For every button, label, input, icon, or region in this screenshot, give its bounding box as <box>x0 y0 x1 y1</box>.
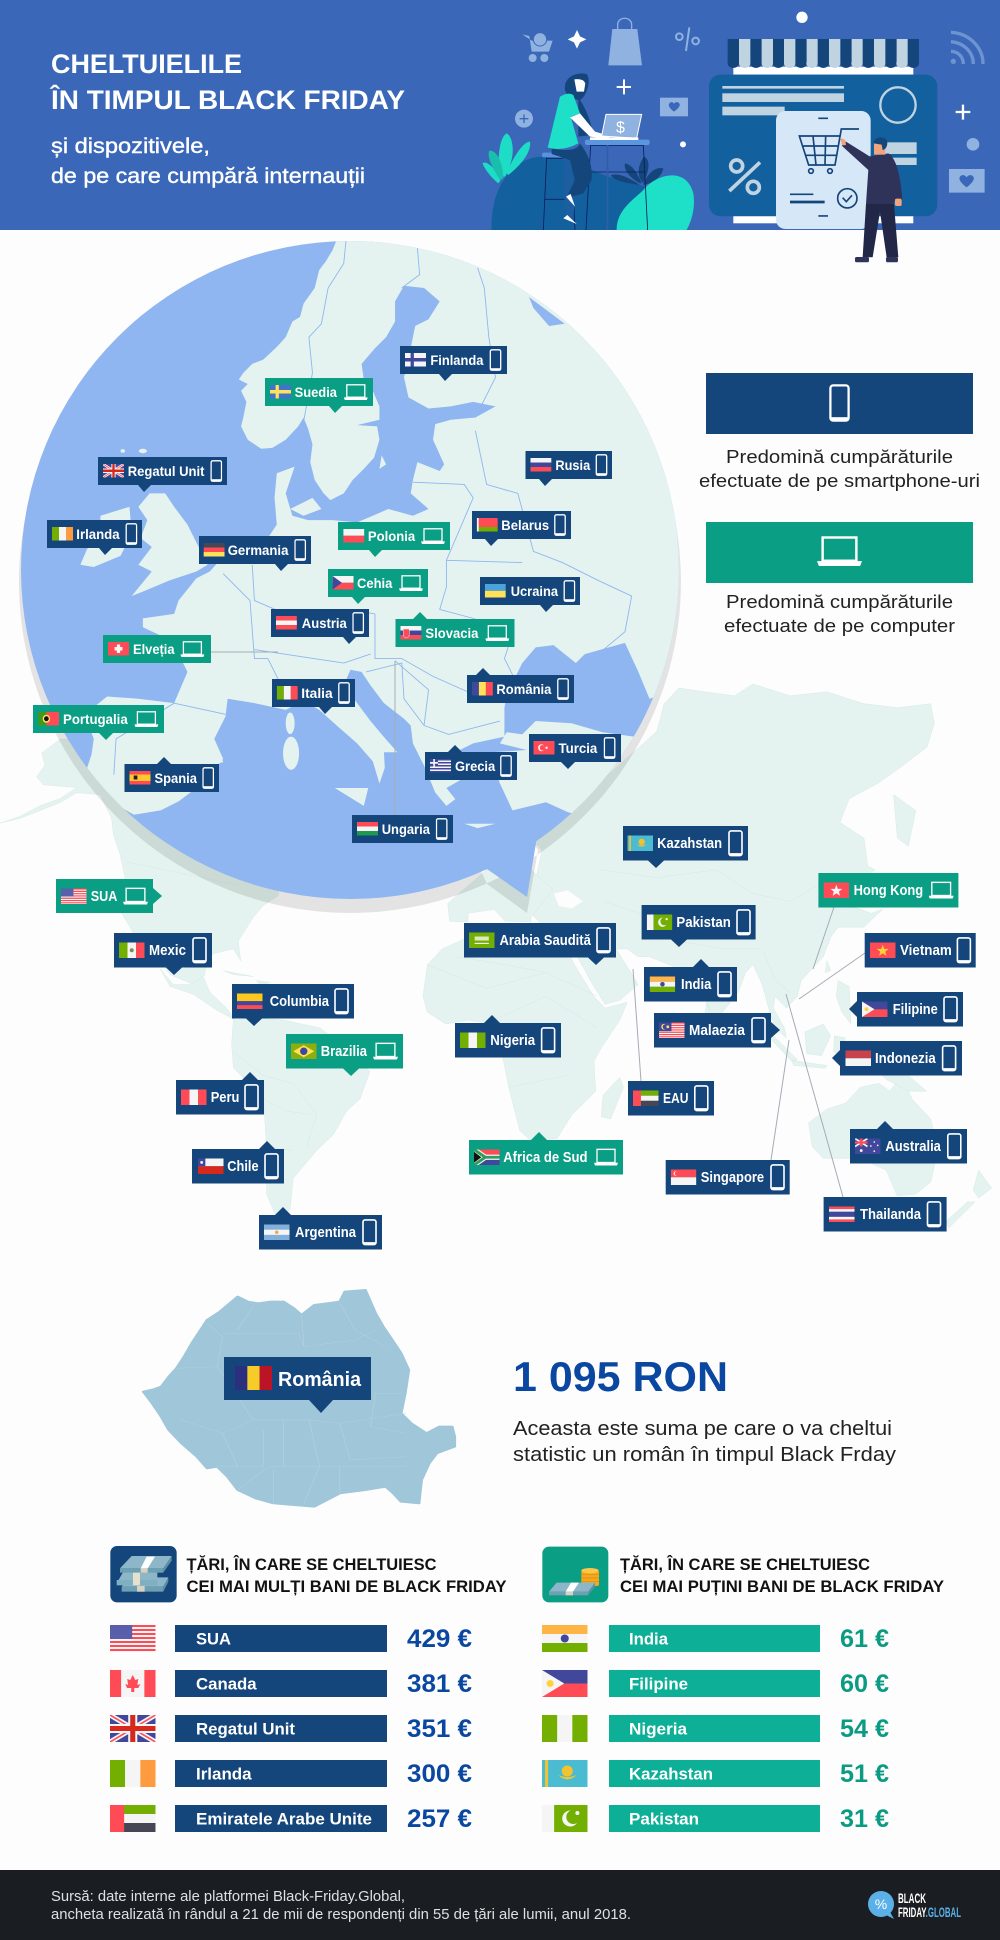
label: Columbia <box>232 984 354 1026</box>
row: Irlanda: 300 € <box>407 1760 472 1788</box>
label: Filipine <box>849 992 963 1026</box>
illustration: woman with laptop: $ <box>616 120 625 137</box>
row: Pakistan: Pakistan <box>629 1810 699 1828</box>
label: Finlanda <box>400 346 507 381</box>
label: Elveția <box>103 635 211 663</box>
heading: most money <box>186 1555 507 1596</box>
logo: BLACK <box>898 1890 926 1906</box>
row: SUA: 429 € <box>407 1625 472 1653</box>
row: Emiratele Arabe Unite: 257 € <box>407 1805 472 1833</box>
label: Ungaria <box>352 815 453 843</box>
label: Pakistan <box>642 905 756 947</box>
label: Vietnam <box>865 933 976 968</box>
label: Suedia <box>265 378 373 413</box>
subtitle <box>51 135 365 188</box>
text: amount description <box>513 1418 896 1466</box>
label: Slovacia <box>396 612 514 647</box>
row: Emiratele Arabe Unite: Emiratele Arabe Unite <box>196 1810 372 1828</box>
label: Kazahstan <box>623 826 748 868</box>
label: Finlanda: Finlanda <box>430 352 484 368</box>
figure: 1 095 RON: 1 095 RON <box>513 1353 728 1400</box>
label: Peru <box>176 1072 264 1114</box>
icon: stacks of banknotes <box>110 1546 177 1602</box>
subtitle: de pe care cumpără internauții <box>51 165 365 188</box>
heading: least money <box>620 1555 945 1596</box>
label: Argentina: Argentina <box>295 1224 357 1241</box>
world map background <box>0 684 992 1228</box>
row: Emiratele Arabe Unite <box>110 1805 472 1833</box>
row: Pakistan: 31 € <box>840 1805 889 1833</box>
label: România: România <box>496 681 552 697</box>
circle shadow <box>19 251 681 913</box>
label: Vietnam: Vietnam <box>900 942 952 959</box>
label: Italia <box>272 679 355 714</box>
footer source text: ancheta realizată în rândul a 21 de mii de respondenți din 55 de țări ale lumii, anul 2018. <box>51 1907 631 1923</box>
label: Chile: Chile <box>227 1158 259 1175</box>
label: Belarus: Belarus <box>501 517 549 533</box>
legend: computer text: efectuate de pe computer <box>724 615 955 636</box>
label: India <box>644 959 737 1002</box>
row: India: 61 € <box>840 1625 889 1653</box>
label: Malaezia: Malaezia <box>689 1022 746 1039</box>
heading: most money: ȚĂRI, ÎN CARE SE CHELTUIESC <box>186 1555 436 1574</box>
label: Chile <box>192 1141 284 1184</box>
label: SUA: SUA <box>91 888 118 905</box>
legend <box>699 373 980 636</box>
label: SUA <box>56 879 162 913</box>
label: India: India <box>681 976 712 993</box>
heading: most money: CEI MAI MULȚI BANI DE BLACK FRIDAY <box>186 1577 507 1596</box>
Romania map <box>143 1290 455 1507</box>
label: Regatul Unit: Regatul Unit <box>128 463 205 479</box>
row: Canada: 381 € <box>407 1670 472 1698</box>
row: Nigeria: 54 € <box>840 1715 889 1743</box>
label: Thailanda <box>824 1197 947 1232</box>
label: Africa de Sud: Africa de Sud <box>503 1149 588 1166</box>
label: Austria <box>271 609 369 644</box>
label: Portugalia: Portugalia <box>63 711 128 727</box>
label: Germania <box>199 536 311 571</box>
label: Thailanda: Thailanda <box>860 1206 922 1223</box>
footer source text: Sursă: date interne ale platformei Black-Friday.Global, <box>51 1889 405 1905</box>
text: amount description: Aceasta este suma pe care o va cheltui <box>513 1418 892 1440</box>
label: Polonia: Polonia <box>368 528 415 544</box>
row: Kazahstan <box>542 1760 889 1788</box>
row: Canada: Canada <box>196 1676 257 1694</box>
table: highest spending <box>110 1625 472 1833</box>
row: India: India <box>629 1630 669 1648</box>
label: Elveția: Elveția <box>133 641 175 657</box>
heading: least money: ȚĂRI, ÎN CARE SE CHELTUIESC <box>620 1555 870 1574</box>
legend: computer bar <box>706 522 973 583</box>
label: Brazilia: Brazilia <box>321 1043 368 1060</box>
label: România (Romania map) <box>224 1357 371 1413</box>
label: Africa de Sud <box>469 1132 623 1174</box>
label: Mexic: Mexic <box>149 942 186 959</box>
row: Nigeria <box>542 1715 889 1743</box>
footer band <box>0 1870 1000 1940</box>
label: Singapore <box>666 1160 790 1194</box>
label: Mexic <box>114 933 212 975</box>
label: EAU: EAU <box>663 1090 688 1107</box>
title: ÎN TIMPUL BLACK FRIDAY <box>49 84 405 115</box>
logo <box>868 1890 961 1920</box>
row: Filipine: Filipine <box>629 1676 688 1694</box>
label: Columbia: Columbia <box>270 993 330 1010</box>
label: Turcia: Turcia <box>558 740 597 756</box>
legend: smartphone text <box>699 446 980 491</box>
label: Peru: Peru <box>211 1089 239 1106</box>
row: Nigeria: Nigeria <box>629 1720 688 1738</box>
label: Cehia <box>328 569 428 604</box>
row: Regatul Unit: Regatul Unit <box>196 1720 296 1738</box>
label: Arabia Saudită: Arabia Saudită <box>500 932 591 949</box>
label: Suedia: Suedia <box>295 384 337 400</box>
label: Austria: Austria <box>302 615 347 631</box>
label: Australia <box>850 1121 967 1164</box>
row: India <box>542 1625 889 1653</box>
label: Portugalia <box>33 705 164 740</box>
label: Singapore: Singapore <box>701 1169 764 1186</box>
row: Filipine <box>542 1670 889 1698</box>
label: Ungaria: Ungaria <box>382 821 430 837</box>
label: Kazahstan: Kazahstan <box>657 835 722 852</box>
row: Kazahstan: Kazahstan <box>629 1766 713 1784</box>
labels: Europe <box>33 346 621 843</box>
row: Kazahstan: 51 € <box>840 1760 889 1788</box>
label: Spania <box>124 757 219 792</box>
label: Hong Kong <box>818 873 958 908</box>
title: CHELTUIELILE <box>51 49 242 79</box>
label: Indonezia <box>832 1041 962 1076</box>
label: Argentina <box>259 1207 382 1250</box>
label: Pakistan: Pakistan <box>676 914 731 931</box>
illustration: online store with shopper <box>709 12 985 262</box>
text: amount description: statistic un român în timpul Black Frday <box>513 1444 896 1466</box>
heading: least money: CEI MAI PUȚINI BANI DE BLACK FRIDAY <box>620 1577 945 1596</box>
label: Turcia <box>529 734 621 769</box>
row: Irlanda <box>110 1760 472 1788</box>
label: Brazilia <box>286 1034 403 1076</box>
label: Regatul Unit <box>98 457 227 492</box>
label: Hong Kong: Hong Kong <box>854 882 923 899</box>
label: Nigeria <box>455 1015 561 1058</box>
legend: smartphone text: efectuate de pe smartphone-uri <box>699 470 980 491</box>
label: Australia: Australia <box>885 1138 941 1155</box>
label: Belarus <box>472 511 571 546</box>
row: Irlanda: Irlanda <box>196 1766 252 1784</box>
legend: computer text <box>724 591 955 636</box>
logo: FRIDAY.GLOBAL <box>898 1904 961 1920</box>
label: Spania: Spania <box>154 770 197 786</box>
label: Rusia <box>526 451 612 486</box>
label: Grecia <box>425 745 517 780</box>
logo: % <box>875 1896 887 1912</box>
legend: smartphone bar <box>706 373 973 434</box>
label: Ucraina: Ucraina <box>511 583 558 599</box>
label: Grecia: Grecia <box>455 758 495 774</box>
label: Irlanda <box>47 520 142 555</box>
labels: Asia, Africa, Oceania <box>455 826 976 1232</box>
label: EAU <box>628 1081 714 1116</box>
table: lowest spending <box>542 1625 889 1833</box>
label: Slovacia: Slovacia <box>425 625 479 641</box>
row: SUA <box>110 1625 472 1653</box>
label: Polonia <box>338 522 450 557</box>
row: Regatul Unit <box>110 1715 472 1743</box>
label: Ucraina <box>480 577 580 612</box>
row: Canada <box>110 1670 472 1698</box>
row: Filipine: 60 € <box>840 1670 889 1698</box>
header background <box>0 0 1000 230</box>
label: Irlanda: Irlanda <box>76 526 120 542</box>
row: SUA: SUA <box>196 1630 231 1648</box>
map: Europe bubble <box>21 241 679 899</box>
legend: computer text: Predomină cumpărăturile <box>726 591 953 612</box>
labels: Americas <box>56 879 403 1250</box>
illustration: woman with laptop <box>483 18 699 230</box>
label: Indonezia: Indonezia <box>875 1050 936 1067</box>
label: Rusia: Rusia <box>555 457 590 473</box>
label: Nigeria: Nigeria <box>490 1032 536 1049</box>
subtitle: și dispozitivele, <box>51 135 210 158</box>
label: Arabia Saudită <box>464 923 616 965</box>
label: România (Romania map): România <box>278 1369 362 1391</box>
label: Germania: Germania <box>228 542 289 558</box>
connector lines <box>211 652 865 1197</box>
label: Filipine: Filipine <box>893 1001 938 1018</box>
title <box>49 49 405 115</box>
footer source text <box>51 1889 631 1923</box>
legend: smartphone text: Predomină cumpărăturile <box>726 446 953 467</box>
label: Malaezia <box>654 1013 780 1048</box>
label: România <box>467 668 574 703</box>
icon: coins and banknotes <box>542 1547 608 1602</box>
label: Italia: Italia <box>301 685 333 701</box>
label: Cehia: Cehia <box>357 575 392 591</box>
row: Regatul Unit: 351 € <box>407 1715 472 1743</box>
row: Pakistan <box>542 1805 889 1833</box>
